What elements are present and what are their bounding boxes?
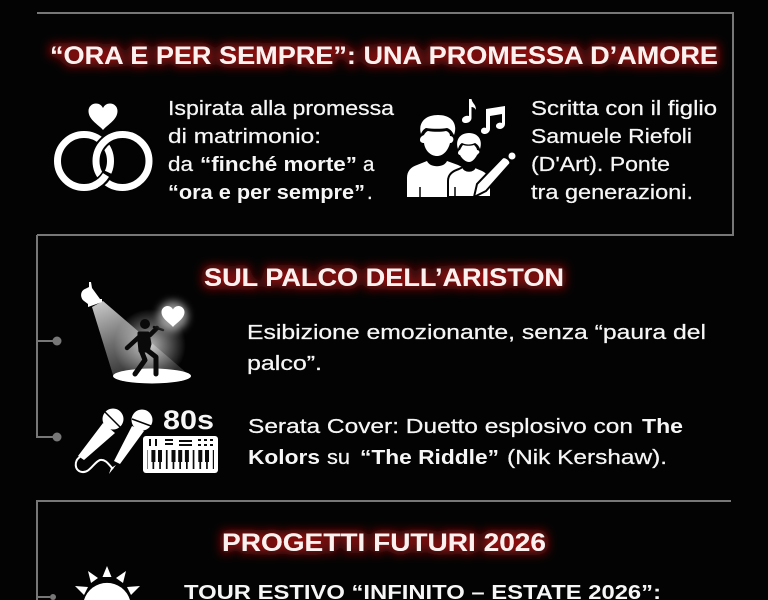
text: scritta con il figlio: tra generazioni. bbox=[531, 181, 693, 204]
text: scritta con il figlio: Scritta con il figlio bbox=[531, 97, 717, 120]
text: ispirata alla promessa: . bbox=[367, 181, 373, 204]
text: esibizione emozionante: Esibizione emozionante, senza “paura del bbox=[247, 321, 706, 344]
text: serata cover: Kolors bbox=[248, 446, 320, 469]
icon: sun bbox=[75, 566, 140, 600]
panel: promessa d'amore bbox=[37, 13, 733, 235]
text: serata cover bbox=[248, 415, 683, 469]
heading: progetti futuri: PROGETTI FUTURI 2026 bbox=[222, 529, 546, 557]
text: scritta con il figlio: Samuele Riefoli bbox=[531, 125, 692, 148]
heading: ora e per sempre: “ORA E PER SEMPRE”: UNA PROMESSA D’AMORE bbox=[50, 42, 718, 70]
text: ispirata alla promessa bbox=[168, 97, 395, 204]
label: 80s: 80s bbox=[163, 405, 214, 435]
text: scritta con il figlio bbox=[531, 97, 717, 204]
text: ispirata alla promessa: “ora e per sempre” bbox=[168, 181, 365, 204]
text: ispirata alla promessa: di matrimonio: bbox=[168, 125, 321, 148]
panel: sul palco dell'ariston bbox=[37, 235, 706, 474]
icon: father and son with notes and pen bbox=[407, 99, 516, 197]
text: serata cover: (Nik Kershaw). bbox=[507, 446, 667, 469]
text: ispirata alla promessa: Ispirata alla promessa bbox=[168, 97, 395, 120]
text: serata cover: su bbox=[327, 446, 350, 469]
heading: sul palco: SUL PALCO DELL’ARISTON bbox=[204, 264, 564, 292]
icon: microphones, keyboard and 80s bbox=[76, 405, 218, 474]
text: ispirata alla promessa: “finché morte” bbox=[200, 153, 357, 176]
text: scritta con il figlio: (D'Art). Ponte bbox=[531, 153, 670, 176]
icon: wedding rings with heart bbox=[58, 104, 149, 188]
text: serata cover: The bbox=[642, 415, 683, 438]
text: serata cover: Serata Cover: Duetto esplosivo con bbox=[248, 415, 633, 438]
text: esibizione emozionante: palco”. bbox=[247, 352, 322, 375]
text: ispirata alla promessa: da bbox=[168, 153, 194, 176]
keyboard bbox=[143, 436, 218, 473]
text: ispirata alla promessa: a bbox=[363, 153, 375, 176]
text: serata cover: “The Riddle” bbox=[360, 446, 499, 469]
panel: progetti futuri 2026 bbox=[37, 501, 731, 600]
text: esibizione emozionante bbox=[247, 321, 706, 375]
icon: singer in spotlight bbox=[81, 282, 191, 384]
